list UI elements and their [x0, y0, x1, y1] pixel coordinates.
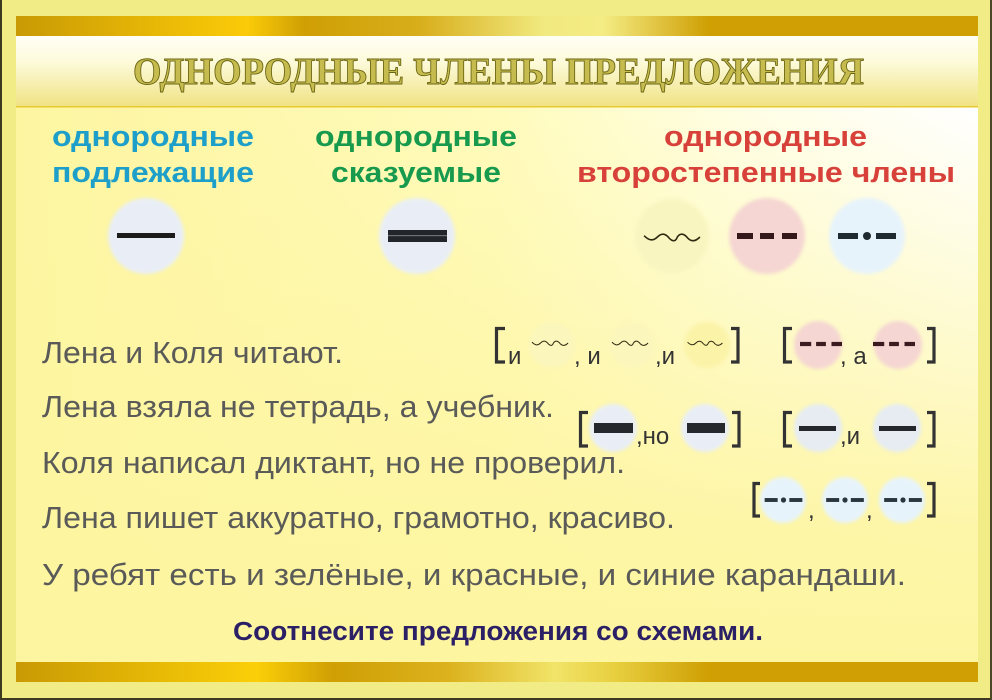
panel: main yellow area: [16, 107, 978, 663]
instruction line: Соотнесите предложения со схемами.: [233, 618, 763, 646]
sentences: Лена и Коля читают.: [42, 335, 343, 370]
title: ОДНОРОДНЫЕ ЧЛЕНЫ ПРЕДЛОЖЕНИЯ: [133, 51, 864, 93]
scheme: wavy, conjunction и repeated: [496, 322, 738, 370]
icon: wavy line (definition): [635, 199, 709, 273]
scheme: dashed, conjunction а: [784, 321, 934, 370]
icon: dashed line (object): [729, 198, 805, 274]
heading: homogeneous subjects: [52, 121, 254, 189]
icon: double line (predicate): [379, 198, 455, 274]
icon: single line (subject): [108, 198, 184, 274]
scheme: single lines, conjunction и: [784, 404, 934, 452]
sentences: Лена взяла не тетрадь, а учебник.: [42, 389, 554, 424]
scheme: double lines, conjunction но: ,но: [636, 423, 669, 450]
icon: dash-dot line (adverbial): [829, 198, 905, 274]
heading: homogeneous subjects: подлежащие: [52, 157, 254, 189]
bottom gold bar: [16, 662, 978, 682]
scheme: dashed, conjunction а: , а: [840, 343, 867, 370]
scheme: wavy, conjunction и repeated: ,и: [655, 343, 675, 370]
heading: homogeneous subjects: однородные: [52, 121, 254, 153]
sentences: [42, 335, 906, 592]
scheme: double lines, conjunction но: [580, 404, 739, 452]
heading: homogeneous secondary members: [577, 121, 955, 189]
sentences: У ребят есть и зелёные, и красные, и синие карандаши.: [42, 557, 906, 592]
panel: title band: [16, 36, 978, 108]
sentences: Лена пишет аккуратно, грамотно, красиво.: [42, 500, 675, 535]
scheme: dash-dot, comma separated: [754, 477, 934, 524]
scheme: dash-dot, comma separated: ,: [808, 497, 815, 524]
sentences: Коля написал диктант, но не проверил.: [42, 445, 625, 480]
scheme: wavy, conjunction и repeated: , и: [574, 343, 601, 370]
heading: homogeneous predicates: однородные: [315, 121, 517, 153]
heading: homogeneous secondary members: второстепенные члены: [577, 157, 955, 189]
scheme: dash-dot, comma separated: ,: [866, 497, 873, 524]
scheme: wavy, conjunction и repeated: и: [508, 343, 521, 370]
heading: homogeneous predicates: [315, 121, 517, 189]
heading: homogeneous secondary members: однородные: [664, 121, 867, 153]
top gold bar: [16, 16, 978, 36]
heading: homogeneous predicates: сказуемые: [331, 157, 501, 189]
scheme: single lines, conjunction и: ,и: [840, 423, 860, 450]
